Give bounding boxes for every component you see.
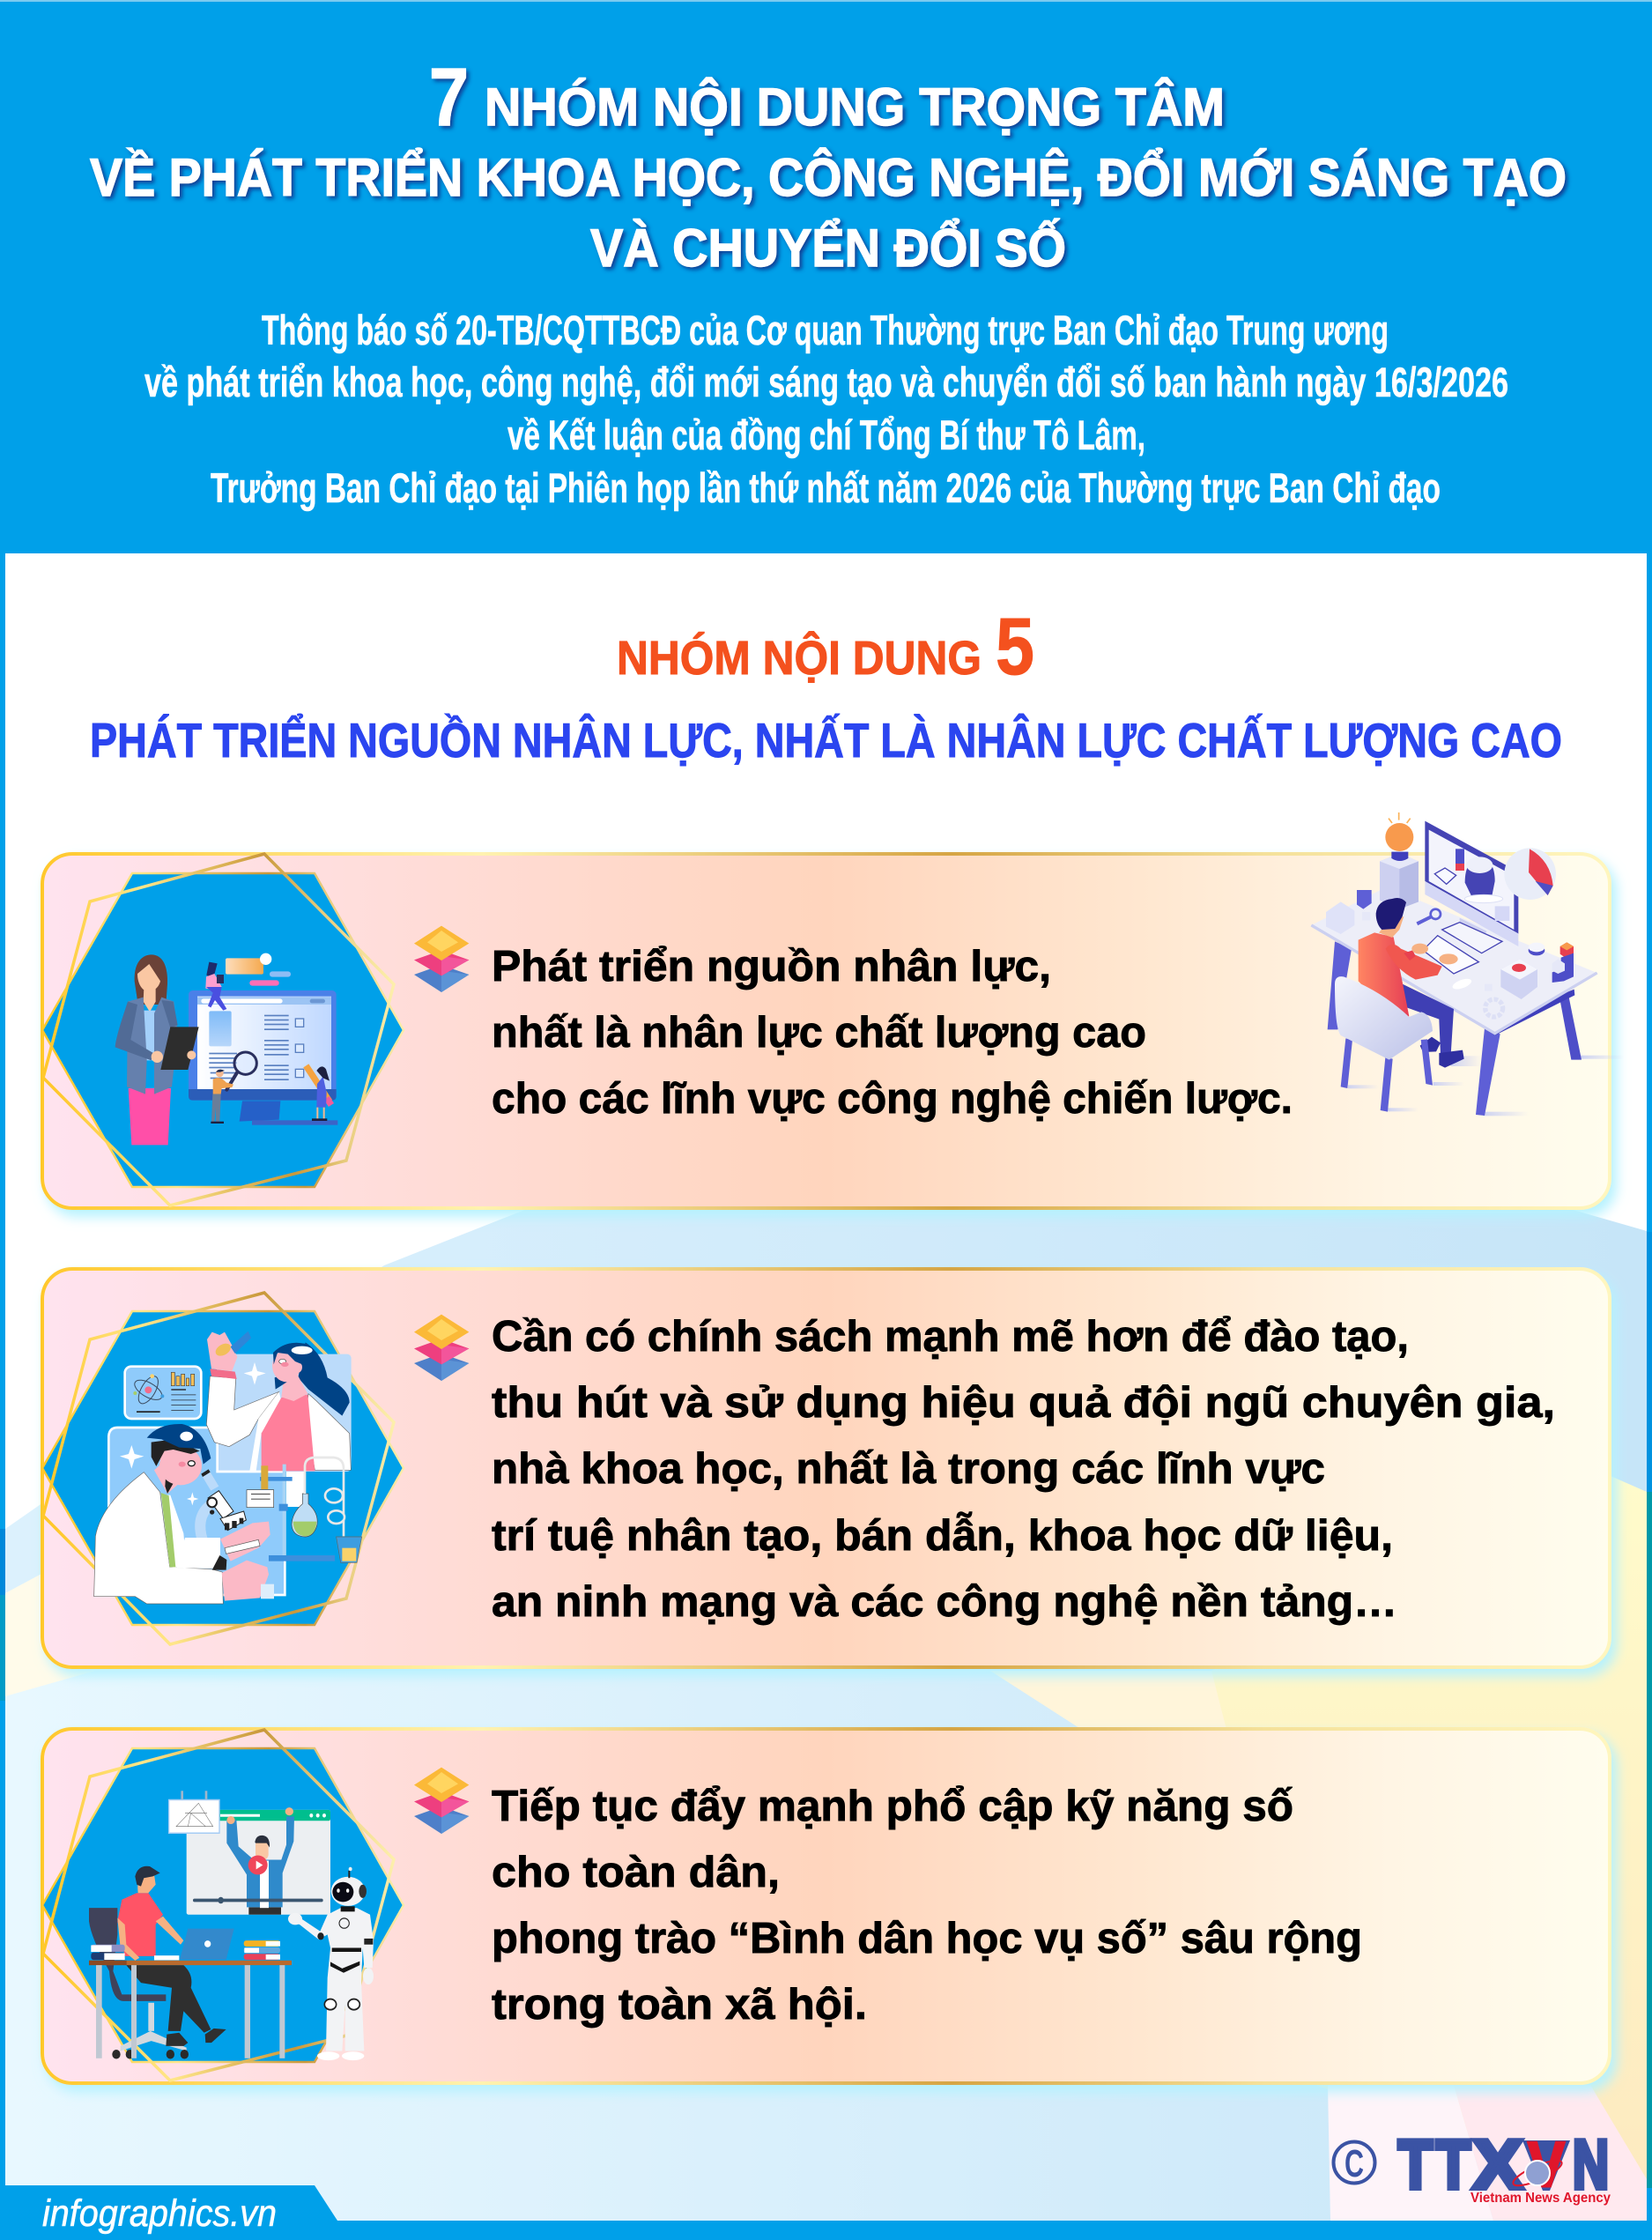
logo: TTXVN: V: [1528, 2130, 1565, 2200]
text block: card 3: phong trào “Bình dân học vụ số” sâu rộng: [492, 1915, 1362, 1962]
illustration: desk workstation: [1311, 812, 1624, 1116]
text block: card 3: Tiếp tục đẩy mạnh phổ cập kỹ năng số: [492, 1783, 1293, 1830]
hexagon frame 1: [42, 854, 404, 1205]
text block: card 2: Cần có chính sách mạnh mẽ hơn để đào tạo,: [492, 1313, 1409, 1361]
header title: VÀ CHUYỂN ĐỔI SỐ: [590, 219, 1066, 278]
copyright mark: [1334, 2141, 1374, 2185]
hexagon frame 2: [42, 1293, 404, 1644]
text block: card 1: [492, 943, 1293, 1123]
text block: card 1: nhất là nhân lực chất lượng cao: [492, 1009, 1146, 1057]
panel: card 3: [42, 1729, 1610, 2083]
logo: TTXVN: [1398, 2125, 1611, 2206]
section heading: group number: NHÓM NỘI DUNG: [617, 631, 982, 685]
text block: card 3: [492, 1783, 1362, 2029]
section heading: group number: 5: [996, 602, 1034, 692]
icon: layers bullet 3: [414, 1768, 469, 1834]
logo: TTXVN: T: [1436, 2125, 1471, 2203]
section heading: group number: [617, 602, 1034, 692]
text block: card 1: Phát triển nguồn nhân lực,: [492, 943, 1051, 990]
text block: card 2: [492, 1313, 1555, 1626]
copyright mark: C: [1345, 2142, 1364, 2185]
illustration: scientists in a lab: [94, 1331, 362, 1604]
logo: TTXVN: X: [1473, 2125, 1522, 2203]
illustration: woman and monitor: [115, 953, 337, 1145]
logo: TTXVN: Vietnam News Agency: [1471, 2191, 1611, 2206]
text block: card 3: cho toàn dân,: [492, 1849, 780, 1896]
header title: NHÓM NỘI DUNG TRỌNG TÂM: [485, 78, 1225, 137]
header title: [90, 51, 1567, 278]
illustration: online learning with robot: [89, 1791, 374, 2060]
text block: card 2: an ninh mạng và các công nghệ nền tảng…: [492, 1578, 1397, 1626]
hexagon frame 3: [42, 1730, 404, 2081]
text block: card 1: cho các lĩnh vực công nghệ chiến lược.: [492, 1075, 1293, 1123]
icon: layers bullet 2: [414, 1315, 469, 1381]
logo: TTXVN: T: [1398, 2125, 1433, 2203]
text block: card 2: nhà khoa học, nhất là trong các lĩnh vực: [492, 1445, 1325, 1493]
header subtitle: [144, 307, 1508, 511]
text block: card 3: trong toàn xã hội.: [492, 1981, 867, 2029]
text block: card 2: trí tuệ nhân tạo, bán dẫn, khoa học dữ liệu,: [492, 1512, 1393, 1560]
header title: VỀ PHÁT TRIỂN KHOA HỌC, CÔNG NGHỆ, ĐỔI MỚI SÁNG TẠO: [90, 148, 1567, 207]
header title: 7: [429, 51, 469, 143]
header subtitle: về Kết luận của đồng chí Tổng Bí thư Tô Lâm,: [507, 412, 1145, 458]
logo: TTXVN: N: [1573, 2125, 1609, 2203]
footer: infographics.vn tab: infographics.vn: [42, 2192, 277, 2235]
panel: card 1: [42, 812, 1624, 1208]
footer: infographics.vn tab: [0, 2185, 1652, 2240]
text block: card 2: thu hút và sử dụng hiệu quả đội ngũ chuyên gia,: [492, 1379, 1555, 1427]
icon: layers bullet 1: [414, 926, 469, 992]
panel: card 2: [42, 1269, 1610, 1667]
